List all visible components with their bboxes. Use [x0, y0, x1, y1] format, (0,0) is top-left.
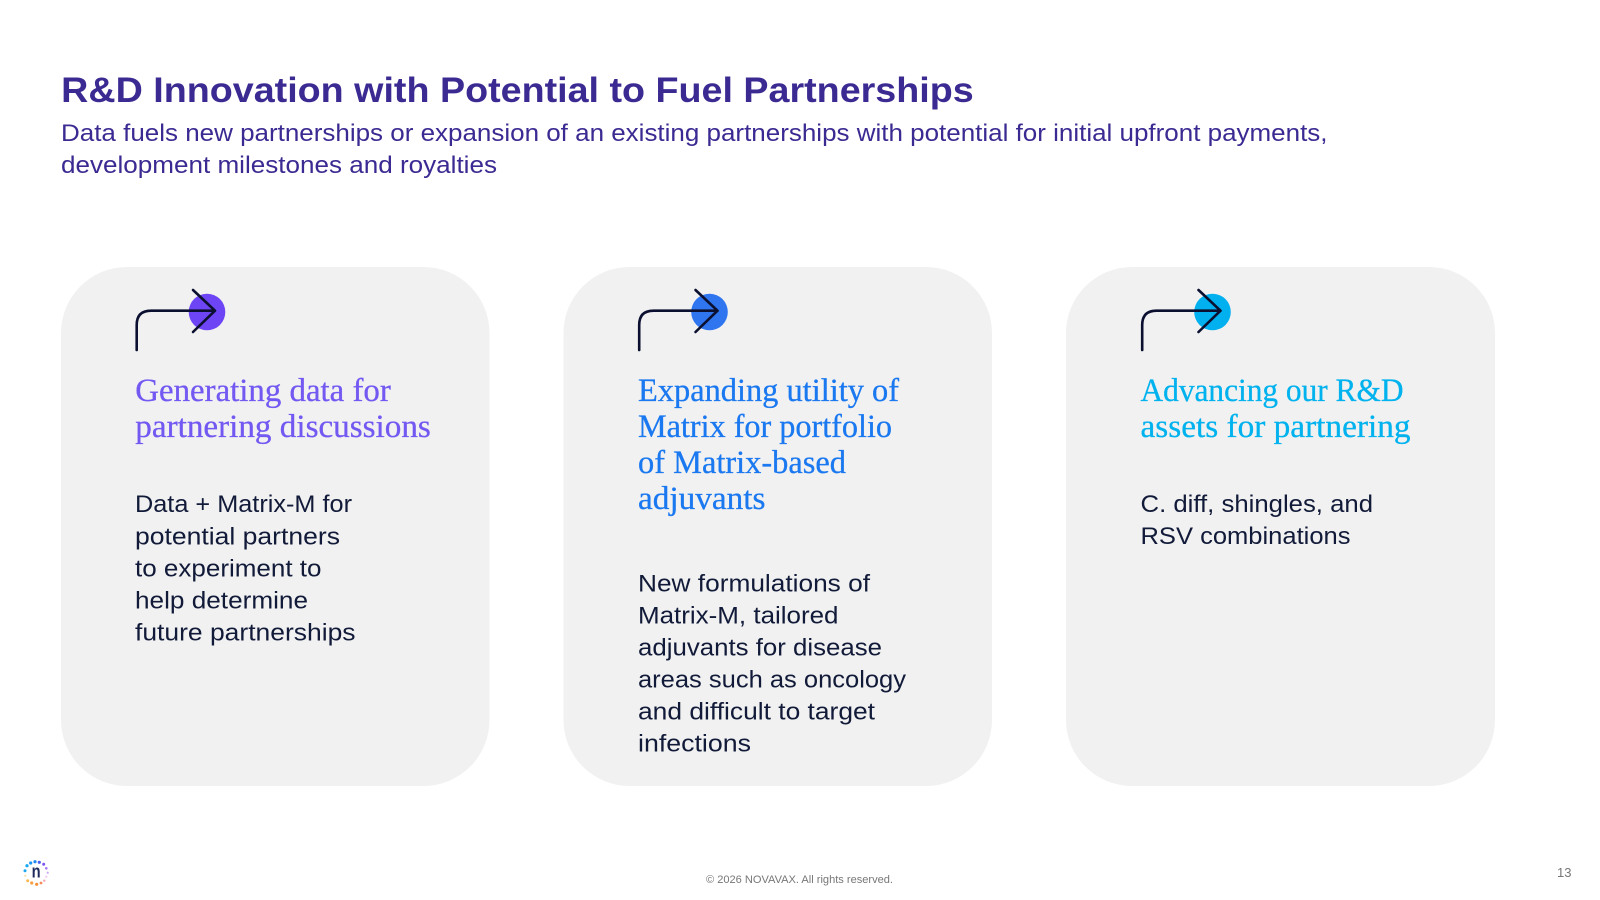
heading: assets for partnering [1140, 409, 1410, 445]
body text: potential partners [135, 523, 340, 550]
heading: Generating data for [135, 373, 391, 409]
body text: areas such as oncology [638, 666, 906, 694]
heading: Expanding utility of [638, 373, 899, 409]
icon: novavax logo: n [32, 862, 41, 882]
body text: adjuvants for disease [638, 634, 882, 662]
footer copyright: © 2026 NOVAVAX. All rights reserved. [706, 874, 893, 886]
body text [1140, 491, 1373, 550]
heading [1140, 373, 1410, 445]
body text: future partnerships [135, 619, 356, 646]
heading [135, 373, 431, 445]
body text: infections [638, 730, 751, 757]
body text [638, 570, 906, 757]
body text: and difficult to target [638, 698, 875, 726]
icon: novavax logo [24, 860, 49, 886]
heading: partnering discussions [135, 409, 431, 445]
body text: C. diff, shingles, and [1140, 491, 1373, 518]
body text: New formulations of [638, 570, 870, 598]
body text: to experiment to [135, 555, 322, 582]
subtitle: development milestones and royalties [61, 152, 497, 179]
icon: arrow with blue dot [639, 290, 728, 350]
body text: help determine [135, 587, 308, 614]
heading [638, 373, 899, 517]
body text [135, 491, 356, 646]
subtitle: Data fuels new partnerships or expansion of an existing partnerships with potential for initial upfront payments, [61, 120, 1328, 147]
heading: adjuvants [638, 481, 766, 517]
heading: of Matrix-based [638, 445, 846, 481]
subtitle [61, 120, 1328, 179]
panel: generating data [61, 267, 490, 786]
icon: arrow with cyan dot [1142, 290, 1231, 350]
body text: RSV combinations [1140, 523, 1350, 550]
icon: arrow with purple dot [137, 290, 225, 350]
heading: Advancing our R&D [1140, 373, 1404, 409]
heading: Matrix for portfolio [638, 409, 892, 445]
body text: Matrix-M, tailored [638, 602, 838, 630]
panel: expanding utility [564, 267, 992, 786]
page number: 13 [1557, 865, 1572, 880]
panel: advancing assets [1066, 267, 1495, 786]
title: R&D Innovation with Potential to Fuel Partnerships [61, 71, 974, 110]
body text: Data + Matrix-M for [135, 491, 352, 518]
